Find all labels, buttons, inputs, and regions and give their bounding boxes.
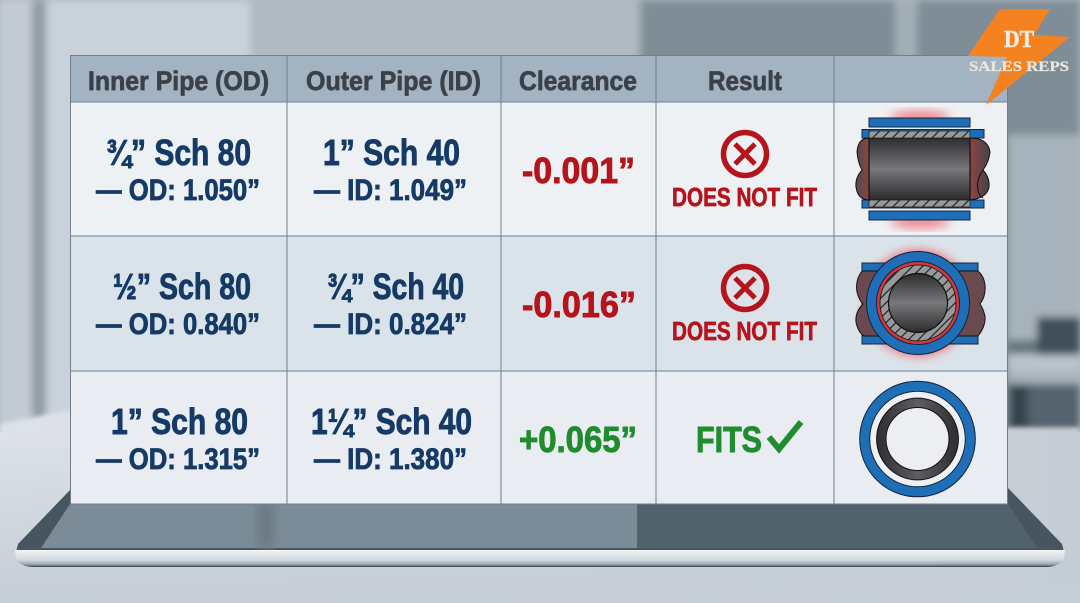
laptop screen darker reflection [637, 504, 1037, 548]
row 3 text: 1” Sch 80 [111, 401, 248, 442]
row 3 text: +0.065” [519, 419, 637, 460]
row 3 text: 1¼” Sch 40 [311, 401, 472, 442]
icon: orange lightning bolt [968, 9, 1070, 105]
table [70, 55, 1008, 504]
header labels: Result [708, 66, 782, 96]
row 2 background [70, 236, 1008, 371]
logo: DT Sales Reps [968, 9, 1070, 105]
row 2 result: does not fit [672, 266, 817, 346]
logo: DT Sales Reps: SALES REPS [969, 59, 1069, 75]
laptop silver edge [15, 550, 1065, 567]
icon: pipe cross section, fits [860, 381, 975, 497]
header labels: Inner Pipe (OD) [88, 66, 269, 96]
row 2 result: does not fit: DOES NOT FIT [672, 316, 817, 346]
row 2 text: — ID: 0.824” [314, 308, 467, 341]
row 2 text: -0.016” [522, 284, 636, 325]
row 2 text: ¾” Sch 40 [327, 266, 464, 307]
laptop base [15, 488, 1065, 567]
icon: green check [769, 422, 801, 449]
row 1 text [96, 132, 635, 207]
row 1 text: -0.001” [522, 150, 635, 191]
row 2 text: ½” Sch 80 [113, 266, 251, 307]
row 1 text: — ID: 1.049” [314, 174, 467, 207]
row 3 result: fits: FITS [696, 419, 762, 460]
row 2 text [96, 266, 636, 341]
row 1 background [70, 102, 1008, 236]
row 1 text: — OD: 1.050” [96, 174, 260, 207]
row 1 result: does not fit [672, 132, 817, 212]
icon: pipe side view, interference [856, 111, 990, 228]
header labels: Outer Pipe (ID) [306, 66, 481, 96]
row 3 text [96, 401, 637, 476]
header labels: Clearance [519, 66, 637, 96]
row 1 text: 1” Sch 40 [323, 132, 460, 173]
icon: red cross circle [724, 266, 766, 310]
row 3 text: — OD: 1.315” [96, 443, 260, 476]
logo: DT Sales Reps: DT [1004, 27, 1034, 53]
row 3 text: — ID: 1.380” [314, 443, 467, 476]
laptop screen bezel [16, 488, 1064, 552]
icon: red cross circle [724, 132, 766, 176]
row 1 text: ¾” Sch 80 [106, 132, 251, 173]
icon: pipe cross section, interference [856, 250, 985, 356]
row 1 result: does not fit: DOES NOT FIT [672, 182, 817, 212]
row 3 background [70, 371, 1008, 504]
header row background [70, 55, 1008, 102]
laptop screen lighter reflection [41, 504, 637, 548]
row 2 text: — OD: 0.840” [96, 308, 260, 341]
header labels [88, 66, 782, 96]
